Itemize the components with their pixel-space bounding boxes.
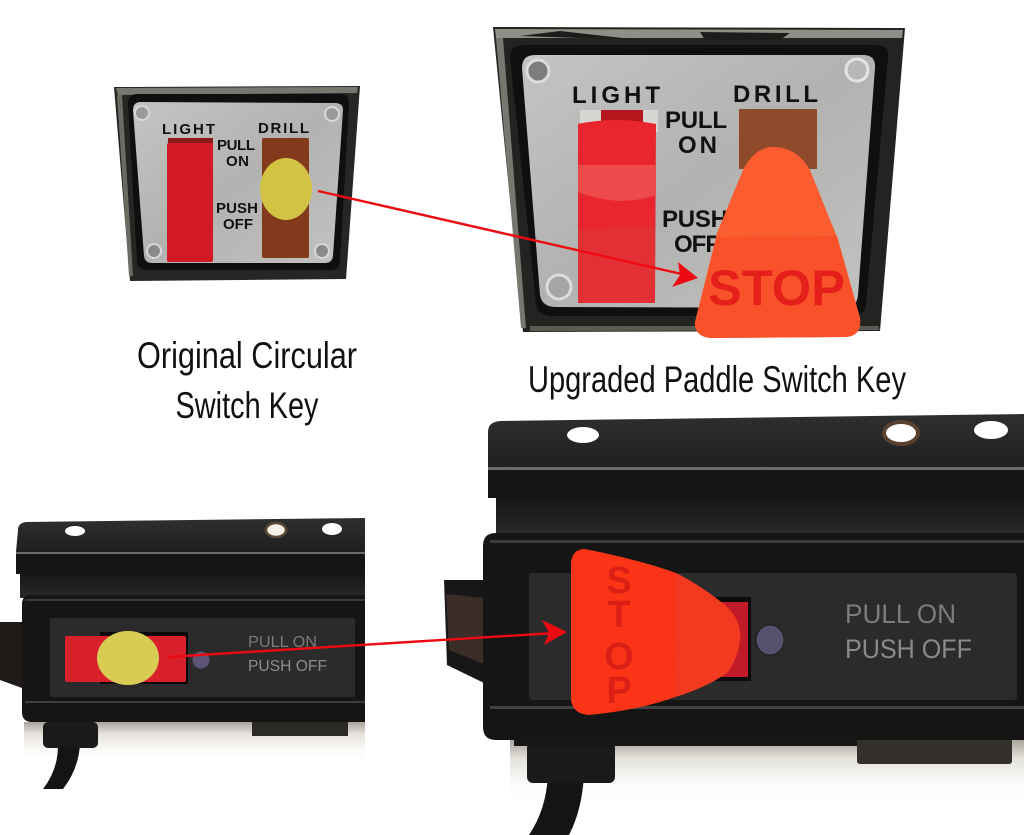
red stop paddle: O [604,636,634,678]
cable [43,745,80,789]
switch housing [114,86,360,281]
panel: original circular switch side view [0,518,365,789]
switch labels: PULL [217,137,255,154]
switch labels: LIGHT [162,121,215,138]
red stop paddle [571,549,740,715]
housing [22,595,365,722]
steel plate [133,102,343,263]
switch labels: PUSH [216,200,258,217]
switch labels [572,81,818,258]
screw [756,625,784,655]
mounting bracket [16,518,365,598]
panel: upgraded paddle switch front view [493,27,905,338]
caption: original circular switch key: Original Circular [137,335,357,376]
housing [483,533,1024,740]
dark red switch body [715,597,751,681]
engraved label [248,634,327,675]
switch labels: ON [678,132,717,159]
caption: original circular switch key: Switch Key [176,385,319,426]
panel: upgraded paddle switch side view [444,414,1024,835]
switch labels [162,120,309,233]
red stop paddle: STOP [708,260,845,316]
engraved label: PULL ON [248,634,317,651]
switch housing [493,27,905,332]
cable [529,775,584,835]
brown drill rocker [739,109,817,169]
red stop paddle: T [607,594,631,636]
engraved label [845,599,972,664]
switch labels: LIGHT [572,82,660,109]
steel plate [522,55,875,308]
engraved label: PUSH OFF [845,634,972,664]
caption: upgraded paddle switch key: Upgraded Paddle Switch Key [528,359,906,400]
brown drill rocker [262,138,309,258]
yellow circular key [97,631,159,685]
red stop paddle: P [606,670,632,712]
engraved label: PULL ON [845,599,956,629]
yellow circular key [260,158,312,220]
red light rocker [167,138,213,262]
switch labels: DRILL [733,81,818,108]
switch labels: OFF [674,231,720,258]
caption: original circular switch key [137,335,357,426]
screw [192,652,210,668]
engraved label: PUSH OFF [248,658,327,675]
panel: original circular switch front view [114,86,360,281]
left tab [444,580,484,683]
switch labels: DRILL [258,120,309,137]
switch labels: PULL [665,107,727,134]
mounting bracket [488,414,1024,536]
red stop paddle: S [606,560,632,602]
red stop paddle [695,147,860,338]
switch labels: OFF [223,216,253,233]
red light rocker [578,110,658,303]
switch labels: PUSH [662,206,728,233]
left tab [0,622,22,688]
red switch [65,632,188,684]
arrow: original key to paddle, front view [318,191,698,287]
switch labels: ON [226,153,249,170]
arrow: original key to paddle, side view [167,620,567,657]
